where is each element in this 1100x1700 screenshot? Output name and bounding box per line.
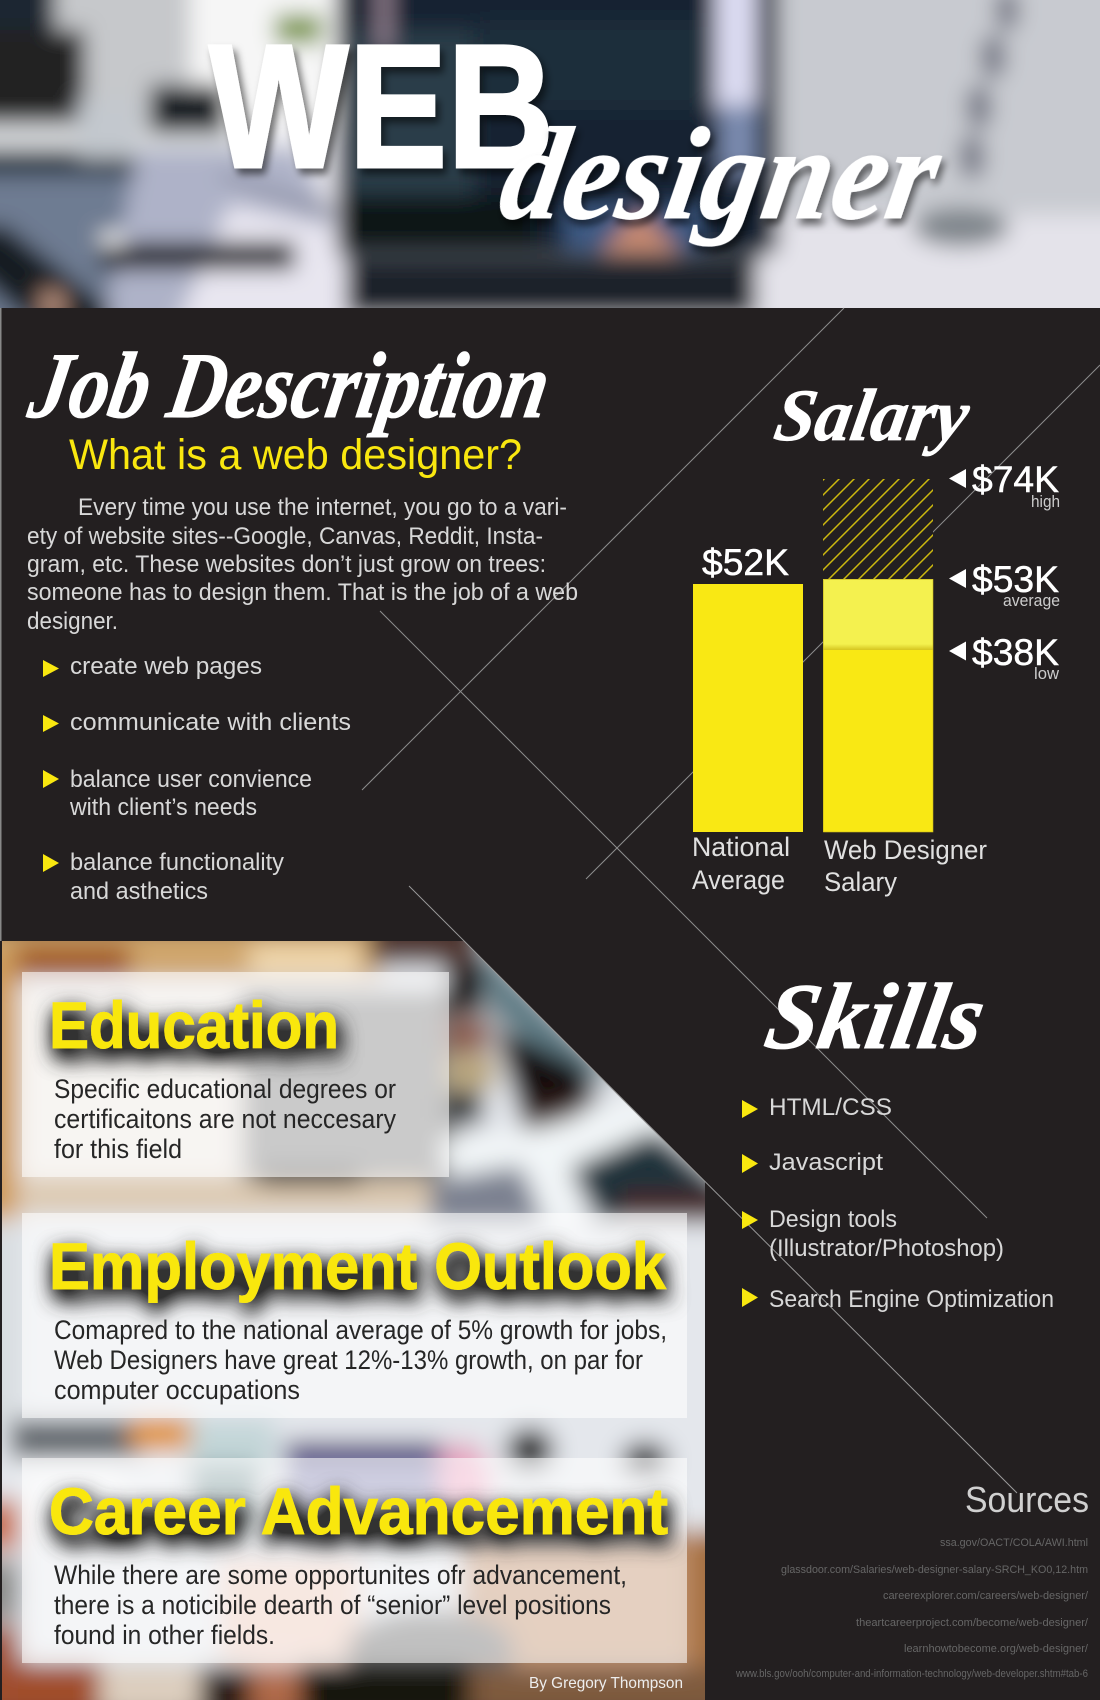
bullet list: duties: balance functionality — [70, 849, 285, 876]
bar chart: $52K — [702, 542, 789, 583]
paragraph: Every time you use the internet, you go to a vari- — [78, 494, 567, 521]
panel edge — [0, 308, 2, 941]
bar chart: high — [1031, 492, 1060, 511]
paragraph: designer. — [27, 608, 118, 635]
bullet list: duties: balance user convience — [70, 766, 312, 793]
card: education — [22, 972, 449, 1177]
paragraph: ety of website sites--Google, Canvas, Reddit, Insta- — [27, 523, 543, 550]
card: career advancement: found in other fields. — [54, 1620, 275, 1650]
bullet list: duties: create web pages — [70, 653, 262, 680]
source list: ssa.gov/OACT/COLA/AWI.html — [940, 1537, 1088, 1549]
paragraph: someone has to design them. That is the job of a web — [27, 579, 578, 606]
panel: skills — [742, 966, 1054, 1313]
bullet list: skills — [742, 1094, 1054, 1313]
bar chart: Web Designer — [824, 835, 987, 865]
card: education: certificaitons are not neccesary — [54, 1104, 397, 1134]
source list: careerexplorer.com/careers/web-designer/ — [883, 1590, 1089, 1602]
heading: job description: Job Description — [21, 335, 558, 438]
bar chart: $38K — [972, 632, 1059, 673]
heading: salary: Salary — [769, 375, 976, 457]
card: career advancement: there is a noticibile dearth of “senior” level positions — [54, 1590, 611, 1620]
card: education: Education — [49, 988, 339, 1062]
bottom photo: blurred workspace — [0, 925, 730, 1700]
panel: sources — [735, 1479, 1089, 1680]
card: employment outlook — [22, 1213, 687, 1418]
paragraph — [27, 494, 578, 635]
bullet list: skills: (Illustrator/Photoshop) — [769, 1235, 1004, 1262]
bullet list: duties: communicate with clients — [70, 709, 351, 736]
bullet list: duties: with client’s needs — [69, 794, 257, 821]
source list: glassdoor.com/Salaries/web-designer-salary-SRCH_KO0,12.htm — [781, 1564, 1088, 1576]
heading: sources: Sources — [965, 1479, 1089, 1520]
diagonal line b — [380, 611, 987, 1218]
bar chart: low — [1034, 664, 1060, 683]
credit: By Gregory Thompson — [529, 1675, 683, 1692]
bullet list: duties: and asthetics — [70, 878, 208, 905]
bar chart: $53K — [972, 559, 1059, 600]
card: employment outlook: Employment Outlook — [49, 1229, 666, 1303]
card: education: Specific educational degrees or — [54, 1074, 396, 1104]
card: employment outlook: Web Designers have great 12%-13% growth, on par for — [54, 1345, 643, 1375]
title: designer: designer — [491, 100, 952, 247]
bullet list: skills: Design tools — [769, 1206, 897, 1233]
heading: skills: Skills — [758, 966, 993, 1069]
card: career advancement: While there are some opportunites ofr advancement, — [54, 1560, 627, 1590]
bullet list: skills: Javascript — [769, 1149, 883, 1176]
card: education: for this field — [54, 1134, 182, 1164]
card: employment outlook: Comapred to the national average of 5% growth for jobs, — [54, 1315, 667, 1345]
bullet list: skills: HTML/CSS — [769, 1094, 892, 1121]
bar chart — [692, 459, 1060, 897]
card: career advancement — [22, 1458, 687, 1663]
title: WEB: WEB — [209, 9, 554, 205]
card: employment outlook: computer occupations — [54, 1375, 300, 1405]
bar chart: average — [1003, 591, 1060, 610]
subheading: What is a web designer? — [69, 431, 522, 479]
photo edge line d — [409, 886, 1017, 1493]
header photo: blurred desk and laptop — [0, 0, 1100, 340]
source list: theartcareerproject.com/become/web-designer/ — [856, 1617, 1089, 1629]
panel: job description — [21, 335, 578, 905]
bar chart: $74K — [972, 459, 1059, 500]
bar chart: National — [692, 832, 790, 862]
source list — [735, 1537, 1089, 1680]
diagonal line c — [586, 365, 1100, 879]
bullet list: skills: Search Engine Optimization — [769, 1286, 1054, 1313]
bar chart: Salary — [824, 867, 897, 897]
card: career advancement: Career Advancement — [49, 1474, 668, 1548]
bar chart: Average — [692, 865, 785, 895]
diagonal line a — [362, 308, 844, 790]
source list: learnhowtobecome.org/web-designer/ — [904, 1643, 1089, 1655]
bullet list: duties — [43, 653, 351, 905]
paragraph: gram, etc. These websites don’t just grow on trees: — [27, 551, 546, 578]
panel: salary — [692, 375, 1060, 897]
